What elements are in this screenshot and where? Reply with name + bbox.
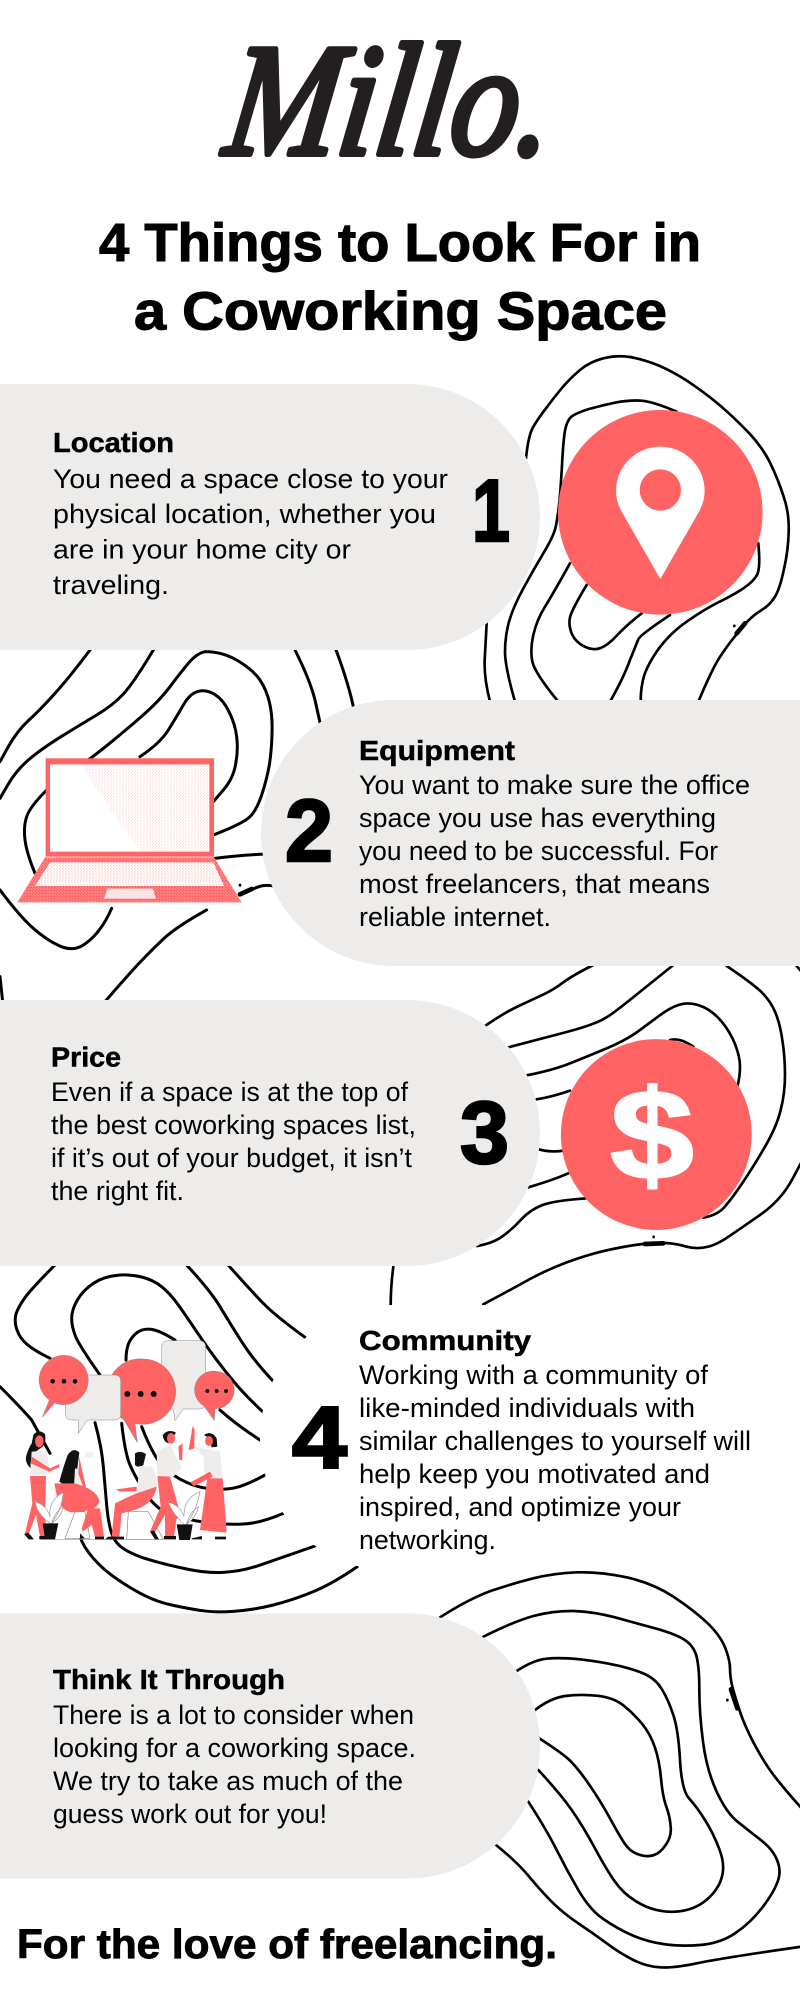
contour lines: lower left: [0, 1263, 357, 1612]
text: think it through body: looking for a coworking space.: [53, 1733, 416, 1763]
contour lines: middle left: [0, 637, 353, 1002]
text: location body: are in your home city or: [53, 534, 351, 564]
text: equipment body: most freelancers, that means: [359, 869, 710, 899]
panel: location: [0, 384, 540, 650]
panel background: location: [0, 384, 540, 650]
title: [99, 213, 701, 342]
person: standing woman right: [189, 1426, 227, 1539]
heading: think it through: Think It Through: [53, 1664, 285, 1695]
person: seated woman: [54, 1450, 104, 1539]
heading: community: Community: [359, 1325, 531, 1356]
text: think it through body: We try to take as much of the: [53, 1766, 403, 1796]
text: equipment body: reliable internet.: [359, 902, 551, 932]
text: community body: like-minded individuals with: [359, 1393, 695, 1423]
icon: dollar in circle: $: [610, 1064, 694, 1207]
heading: price: Price: [51, 1042, 121, 1072]
panel: price: [0, 1000, 540, 1266]
text: think it through body: [53, 1700, 416, 1829]
text: equipment body: you need to be successful. For: [359, 836, 718, 866]
text: location body: physical location, whether you: [53, 499, 436, 529]
panel background: price: [0, 1000, 540, 1266]
panel background: equipment: [261, 700, 800, 966]
text: location body: You need a space close to your: [53, 464, 448, 494]
panel: think it through: [0, 1614, 540, 1878]
person: standing woman: [24, 1431, 59, 1539]
contour lines: top right: [485, 356, 789, 702]
panel: community (white): [260, 1305, 800, 1571]
text: community body: similar challenges to yourself will: [359, 1426, 751, 1456]
person: standing man: [150, 1431, 183, 1539]
text: price body: the best coworking spaces list,: [51, 1110, 416, 1140]
illustration: people talking: [24, 1341, 234, 1540]
text: think it through body: guess work out for you!: [53, 1799, 327, 1829]
text: equipment body: You want to make sure the office: [359, 770, 750, 800]
icon: dollar in circle: [561, 1039, 752, 1230]
plant left: [35, 1492, 63, 1539]
text: community body: networking.: [359, 1525, 496, 1555]
text: location body: traveling.: [53, 570, 169, 600]
speech bubbles: [39, 1341, 234, 1443]
contour lines: bottom right: [440, 1572, 800, 1967]
icon: laptop: [17, 758, 242, 902]
text: community body: help keep you motivated and: [359, 1459, 710, 1489]
text: equipment body: [359, 770, 750, 932]
chairs: [65, 1512, 163, 1539]
text: price body: if it’s out of your budget, it isn’t: [51, 1143, 413, 1173]
text: location body: [53, 464, 448, 600]
text: price body: Even if a space is at the top of: [51, 1077, 409, 1107]
text: community body: inspired, and optimize your: [359, 1492, 681, 1522]
text: equipment body: space you use has everything: [359, 803, 716, 833]
title: 4 Things to Look For in: [99, 213, 701, 273]
text: think it through body: There is a lot to consider when: [53, 1700, 414, 1730]
person: seated man: [105, 1452, 157, 1539]
heading: equipment: Equipment: [359, 735, 515, 766]
contour lines: middle right: [391, 965, 800, 1307]
tagline: For the love of freelancing.: [17, 1921, 557, 1967]
number 1: 1: [472, 461, 510, 560]
heading: location: Location: [53, 427, 174, 458]
title: a Coworking Space: [134, 282, 667, 342]
panel background: think it through: [0, 1614, 540, 1878]
ground line: [42, 1538, 163, 1540]
panel: equipment: [261, 700, 800, 966]
icon: location pin in circle: [558, 410, 763, 615]
number 4: 4: [292, 1388, 347, 1487]
logo: Millo.: [215, 12, 567, 189]
number 3: 3: [460, 1083, 509, 1182]
text: price body: [51, 1077, 416, 1206]
text: price body: the right fit.: [51, 1176, 184, 1206]
plant right: [168, 1492, 200, 1540]
panel background: community: [260, 1305, 800, 1571]
number 2: 2: [285, 781, 333, 880]
text: community body: [359, 1360, 751, 1555]
text: community body: Working with a community of: [359, 1360, 709, 1390]
